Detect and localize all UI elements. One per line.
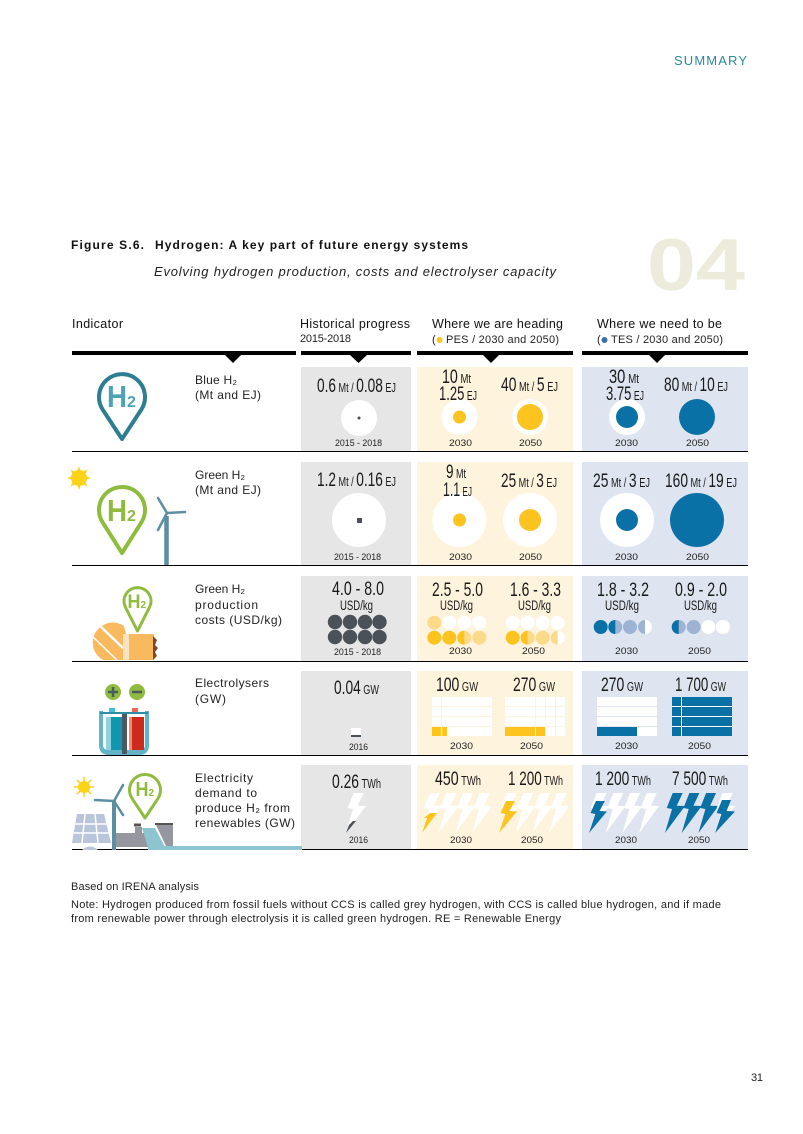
column headers: ( <box>597 334 601 346</box>
green hydrogen historical value: 2015 - 2018 <box>334 552 381 563</box>
chapter number: 04 <box>647 225 745 306</box>
electrolysers heading 2030: 100 GW <box>436 674 479 696</box>
figure title: Figure S.6. <box>71 238 144 252</box>
page number: 31 <box>751 1072 763 1084</box>
green hydrogen heading 2050: 2050 <box>519 552 542 563</box>
row label: electrolysers <box>195 676 269 706</box>
cost heading 2030: 2.5 - 5.0 <box>432 579 483 601</box>
cost heading 2030: 2030 <box>449 646 472 657</box>
cost heading 2050: USD/kg <box>518 597 551 613</box>
blue hydrogen need 2030: 3.75 EJ <box>606 383 644 405</box>
blue hydrogen need 2050 <box>664 374 728 449</box>
green hydrogen historical value <box>317 469 396 563</box>
electrolysers need 2030 <box>597 674 657 752</box>
section label: summary: SUMMARY <box>674 53 747 68</box>
electrolysers heading 2030 <box>432 674 492 752</box>
blue hydrogen heading 2030: 2030 <box>449 438 472 449</box>
blue hydrogen heading 2030: 1.25 EJ <box>439 383 477 405</box>
green hydrogen heading 2030: 9 Mt <box>446 461 466 483</box>
cost need 2030: 2030 <box>615 646 638 657</box>
cost historical value and dots: USD/kg <box>340 597 373 613</box>
green hydrogen need 2050: 160 Mt / 19 EJ <box>665 470 737 492</box>
cost heading 2050 <box>506 579 565 657</box>
electricity heading 2030: 450 TWh <box>435 768 481 790</box>
column headers: Where we are heading <box>432 317 563 331</box>
electrolysers need 2050: 1 700 GW <box>675 674 726 696</box>
row label: green hydrogen: Green H₂ <box>195 468 245 482</box>
electrolysers historical value: 2016 <box>349 742 368 753</box>
electricity need 2030 <box>589 768 659 846</box>
cost heading 2050: 2050 <box>522 646 545 657</box>
electricity need 2030: 1 200 TWh <box>595 768 651 790</box>
icon: green hydrogen pin: H <box>107 493 127 528</box>
electricity heading 2050: 2050 <box>521 835 543 846</box>
column headers <box>72 317 723 346</box>
electricity need 2050: 2050 <box>688 835 710 846</box>
column headers: ( <box>432 334 436 346</box>
row label: electricity demand: demand to <box>195 786 257 800</box>
cost need 2050: USD/kg <box>684 597 717 613</box>
row label: electricity demand: renewables (GW) <box>195 816 295 830</box>
electricity historical value <box>332 771 381 846</box>
electricity heading 2030 <box>422 768 492 846</box>
green hydrogen heading 2030: 2030 <box>449 552 472 563</box>
row label: green hydrogen <box>195 468 261 497</box>
cost need 2050 <box>672 579 730 657</box>
green hydrogen heading 2050 <box>501 470 557 563</box>
icon: electrolyser tank <box>99 684 149 755</box>
row label: production costs: Green H₂ <box>195 582 245 596</box>
blue hydrogen heading 2050 <box>501 374 558 449</box>
electrolysers need 2050 <box>672 674 732 752</box>
green hydrogen need 2030 <box>593 470 654 563</box>
source note: Based on IRENA analysis <box>71 881 200 893</box>
cost need 2030: 1.8 - 3.2 <box>597 579 649 601</box>
panel: where we need to be column <box>582 367 748 849</box>
electrolysers need 2050: 2050 <box>688 741 711 752</box>
electrolysers heading 2050 <box>505 674 565 752</box>
row label: electricity demand: Electricity <box>195 771 253 785</box>
column headers: Historical progress <box>300 317 410 331</box>
blue hydrogen historical value <box>317 375 396 449</box>
column headers: TES / 2030 and 2050) <box>611 334 723 346</box>
cost heading 2030 <box>427 579 486 657</box>
electrolysers historical value: 0.04 GW <box>334 677 380 699</box>
row label: electricity demand <box>195 771 295 830</box>
green hydrogen need 2030: 2030 <box>615 552 638 563</box>
panel: historical progress column <box>301 367 411 849</box>
column headers: PES / 2030 and 2050) <box>446 334 559 346</box>
column headers: Where we need to be <box>597 317 722 331</box>
cost historical value and dots <box>328 578 387 658</box>
icon: renewable electricity scene <box>72 775 302 850</box>
cost need 2030 <box>594 579 652 657</box>
green hydrogen need 2050 <box>665 470 737 563</box>
icon: blue hydrogen pin: 2 <box>127 394 136 411</box>
row label: production costs: costs (USD/kg) <box>195 613 282 627</box>
icon: hydrogen cost coin and hand <box>93 588 158 660</box>
row label: blue hydrogen: Blue H₂ <box>195 373 237 387</box>
panel: where we are heading column <box>417 367 573 849</box>
footnote: from renewable power through electrolysis it is called green hydrogen. RE = Renewable Energy <box>71 913 562 925</box>
cost need 2050: 2050 <box>688 646 711 657</box>
blue hydrogen need 2030: 2030 <box>615 438 638 449</box>
cost need 2050: 0.9 - 2.0 <box>675 579 727 601</box>
blue hydrogen historical value: 2015 - 2018 <box>335 438 382 449</box>
electricity need 2030: 2030 <box>615 835 637 846</box>
blue hydrogen heading 2030: 10 Mt <box>442 366 471 388</box>
icon: renewable electricity scene: 2 <box>148 788 154 799</box>
electrolysers heading 2050: 270 GW <box>513 674 556 696</box>
icon: green hydrogen pin: 2 <box>127 508 136 525</box>
electricity need 2050 <box>665 768 735 846</box>
figure subtitle: Evolving hydrogen production, costs and electrolyser capacity <box>154 264 558 279</box>
icon: green hydrogen pin <box>99 487 145 553</box>
blue hydrogen need 2050: 2050 <box>686 438 709 449</box>
icon: hydrogen cost coin and hand: 2 <box>140 600 146 611</box>
icon: sun <box>67 466 91 490</box>
cost heading 2050: 1.6 - 3.3 <box>510 579 561 601</box>
electrolysers heading 2050: 2050 <box>520 741 543 752</box>
green hydrogen historical value: 1.2 Mt / 0.16 EJ <box>317 469 396 491</box>
electricity historical value: 0.26 TWh <box>332 771 381 793</box>
blue hydrogen heading 2030 <box>439 366 478 449</box>
row label: electrolysers: (GW) <box>195 692 226 706</box>
electricity heading 2030: 2030 <box>450 835 472 846</box>
column headers: 2015-2018 <box>300 333 351 345</box>
green hydrogen need 2030: 25 Mt / 3 EJ <box>593 470 650 492</box>
blue hydrogen need 2030: 30 Mt <box>609 366 639 388</box>
green hydrogen need 2050: 2050 <box>686 552 709 563</box>
blue hydrogen heading 2050: 2050 <box>519 438 542 449</box>
electrolysers heading 2030: 2030 <box>450 741 473 752</box>
green hydrogen heading 2050: 25 Mt / 3 EJ <box>501 470 557 492</box>
blue hydrogen need 2050: 80 Mt / 10 EJ <box>664 374 728 396</box>
green hydrogen heading 2030: 1.1 EJ <box>443 479 472 501</box>
electricity historical value: 2016 <box>349 835 368 846</box>
electrolysers historical value <box>334 677 380 753</box>
row label: blue hydrogen: (Mt and EJ) <box>195 388 261 402</box>
icon: renewable electricity scene: H <box>136 779 148 801</box>
row label: production costs <box>195 582 282 627</box>
column headers: Indicator <box>72 317 123 331</box>
icon: wind turbine <box>158 498 185 565</box>
figure title: Hydrogen: A key part of future energy systems <box>155 238 468 252</box>
green hydrogen heading 2030 <box>432 461 486 563</box>
cost heading 2030: USD/kg <box>440 597 473 613</box>
blue hydrogen heading 2050: 40 Mt / 5 EJ <box>501 374 558 396</box>
row label: production costs: production <box>195 598 258 612</box>
cost historical value and dots: 2015 - 2018 <box>334 647 381 658</box>
cost historical value and dots: 4.0 - 8.0 <box>332 578 384 600</box>
electricity heading 2050: 1 200 TWh <box>508 768 563 790</box>
icon: hydrogen cost coin and hand: H <box>128 592 140 613</box>
electrolysers need 2030: 2030 <box>615 741 638 752</box>
header bars with pointers <box>72 351 748 363</box>
blue hydrogen historical value: 0.6 Mt / 0.08 EJ <box>317 375 396 397</box>
row label: electricity demand: produce H₂ from <box>195 801 290 815</box>
footnote: Note: Hydrogen produced from fossil fuels without CCS is called grey hydrogen, with CCS is called blue hydrogen, and if made <box>71 899 721 911</box>
icon: blue hydrogen pin <box>99 374 145 439</box>
row label: green hydrogen: (Mt and EJ) <box>195 483 261 497</box>
row label: electrolysers: Electrolysers <box>195 676 269 690</box>
cost need 2030: USD/kg <box>605 597 639 613</box>
icon: blue hydrogen pin: H <box>107 379 127 414</box>
electricity heading 2050 <box>499 768 569 846</box>
blue hydrogen need 2030 <box>606 366 645 449</box>
row label: blue hydrogen <box>195 373 261 402</box>
electricity need 2050: 7 500 TWh <box>672 768 728 790</box>
electrolysers need 2030: 270 GW <box>601 674 644 696</box>
footnote <box>71 899 721 925</box>
